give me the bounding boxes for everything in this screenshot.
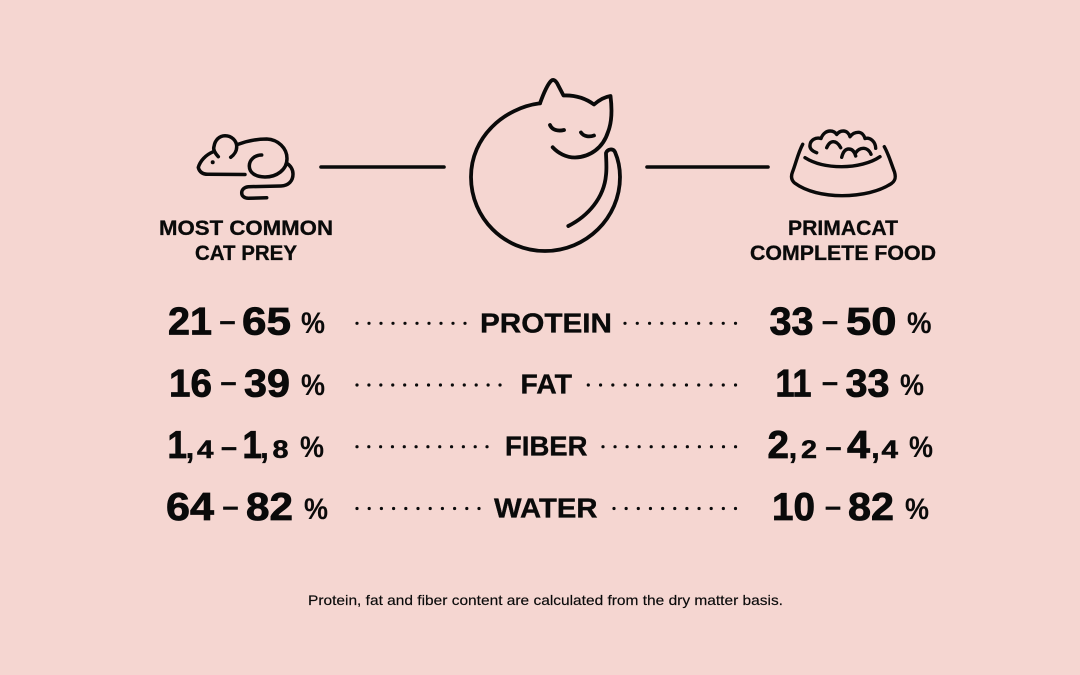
row: fiber: –	[826, 432, 842, 462]
row: fat: 1	[792, 362, 812, 406]
row: water: WATER	[494, 492, 598, 524]
row: fiber: ,	[871, 429, 880, 465]
row: fiber: –	[221, 432, 237, 462]
row: protein: %	[301, 307, 325, 340]
row: fiber: FIBER	[505, 430, 588, 462]
row: fiber: ,	[186, 429, 194, 465]
heading: primacat complete food: PRIMACAT	[788, 217, 898, 240]
row: fiber: 4	[882, 436, 898, 464]
row: fat: FAT	[520, 368, 572, 400]
row: protein: 50	[846, 301, 896, 344]
connector: right	[647, 165, 768, 169]
heading: most common cat prey	[159, 217, 333, 265]
row: protein: %	[907, 307, 932, 340]
row: fiber	[168, 424, 933, 467]
row: fiber: 2	[768, 424, 789, 467]
row: fat: 16	[169, 362, 212, 406]
row: fiber: %	[300, 431, 324, 464]
row: fat: %	[900, 369, 924, 402]
icon: food bowl	[791, 131, 895, 196]
row: protein: 33	[770, 301, 814, 344]
row: water: –	[825, 492, 841, 522]
row: water	[166, 486, 929, 529]
row: water: %	[905, 493, 929, 526]
row: protein: 21	[168, 301, 212, 344]
row: fat: 1	[776, 362, 794, 406]
row: water: 64	[166, 486, 214, 529]
row: protein: PROTEIN	[480, 308, 612, 338]
row: fiber: 4	[847, 424, 870, 467]
row: fiber: 8	[272, 436, 289, 464]
heading: most common cat prey: MOST COMMON	[159, 217, 333, 240]
row: fat: 39	[244, 362, 290, 406]
row: water: –	[222, 492, 238, 522]
row: protein	[168, 301, 932, 344]
row: fat: 33	[846, 362, 890, 406]
row: fiber: 2	[801, 436, 817, 464]
row: water: %	[304, 493, 328, 526]
row: water: 82	[848, 486, 894, 529]
heading: most common cat prey: CAT PREY	[195, 242, 297, 265]
row: protein: –	[220, 306, 236, 336]
connector: left	[321, 165, 444, 169]
row: water: 82	[246, 486, 293, 529]
heading: primacat complete food: COMPLETE FOOD	[750, 242, 936, 265]
row: fat: –	[822, 367, 838, 397]
row: fat	[169, 362, 924, 406]
row: fat: %	[301, 369, 325, 402]
row: fiber: ,	[260, 429, 269, 465]
row: fiber: 1	[242, 424, 262, 467]
heading: primacat complete food	[750, 217, 936, 265]
icon: sleeping cat	[471, 80, 620, 251]
row: fat: –	[220, 367, 236, 397]
row: water: 10	[772, 486, 815, 529]
row: fiber: %	[909, 431, 933, 464]
row: fiber: ,	[788, 429, 797, 465]
icon: mouse	[198, 136, 293, 198]
row: fiber: 1	[168, 424, 187, 467]
footnote: Protein, fat and fiber content are calculated from the dry matter basis.	[308, 592, 783, 608]
row: fiber: 4	[197, 436, 214, 464]
row: protein: –	[822, 306, 838, 336]
row: protein: 65	[242, 301, 291, 344]
